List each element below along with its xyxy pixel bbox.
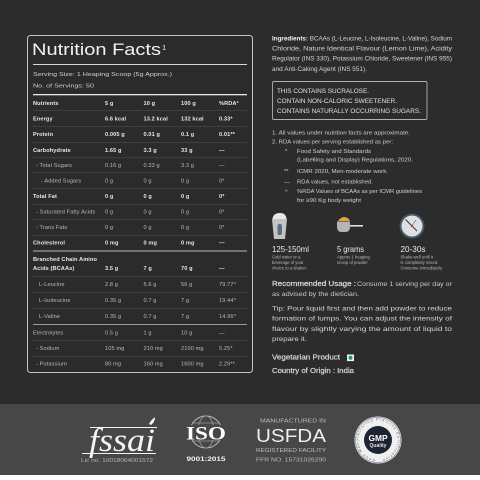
- nutrition table: - Total Sugars: [36, 163, 72, 169]
- nutrition table: 0 g: [105, 210, 113, 216]
- serving information: Serving Size: 1 Heaping Scoop (5g Approx.): [33, 72, 172, 78]
- nutrition table: 0.33*: [219, 116, 233, 122]
- nutrition table: Acids (BCAAs): [33, 266, 74, 272]
- nutrition table: %RDA²: [219, 100, 239, 107]
- footnotes: ICMR 2020, Men-moderate work.: [297, 169, 388, 175]
- panel: certifications band: [0, 404, 480, 475]
- nutrition table: 0 mg: [144, 240, 157, 246]
- nutrition table: 3.3 g: [144, 148, 157, 154]
- nutrition table: 0 g: [105, 178, 113, 184]
- footnotes: *: [285, 149, 288, 155]
- nutrition table: 0.01 g: [144, 132, 161, 138]
- nutrition table: 0.33 g: [144, 163, 160, 169]
- nutrition table: 0 g: [181, 194, 190, 200]
- logo: fssai: Lic no. 10018064001572: [81, 458, 153, 464]
- step: powder amount: Approx 1 heaping: [337, 254, 370, 260]
- nutrition table: 0 g: [105, 225, 113, 231]
- nutrition table: 0*: [219, 225, 225, 231]
- nutrition table: 14.96^: [219, 314, 237, 320]
- step: shake time: is completely mixed.: [400, 260, 438, 265]
- step: powder amount: [337, 245, 370, 265]
- step: water amount: choice to a shaker.: [272, 266, 307, 270]
- logo: USFDA registered: REGISTERED FACILITY: [256, 448, 326, 454]
- callout: sweetener warning: CONTAINS NATURALLY OCCURRING SUGARS.: [277, 108, 421, 115]
- recommended usage: as advised by the dietician.: [272, 291, 359, 298]
- nutrition table: 0.005 g: [105, 132, 125, 138]
- title: Nutrition Facts: [32, 40, 161, 59]
- serving information: No. of Servings: 50: [33, 84, 94, 90]
- nutrition table: 0.5 g: [105, 330, 118, 336]
- footnotes: %RDA Values of BCAAs as per ICMR guidelines: [297, 189, 422, 195]
- step: water amount: beverage of your: [272, 260, 304, 265]
- vegetarian product: Vegetarian Product: [272, 354, 340, 362]
- icon: scoop: [337, 217, 363, 232]
- ingredients text: Ingredients: BCAAs (L-Leucine, L-Isoleucine, L-Valine), Sodium: [272, 36, 452, 42]
- nutrition table: L-Valine: [39, 314, 60, 320]
- recommended usage: Recommended Usage :: [272, 281, 356, 288]
- nutrition table: Electrolytes: [33, 330, 63, 336]
- nutrition table: 0.16 g: [105, 163, 121, 169]
- icon: shaker: [272, 213, 287, 239]
- nutrition table: 2.29**: [219, 362, 236, 368]
- nutrition table: 7 g: [181, 298, 189, 304]
- footnotes: 2. RDA values per serving established as per:: [272, 139, 393, 145]
- nutrition table: 2100 mg: [181, 346, 204, 352]
- step: powder amount: scoop of powder: [337, 260, 368, 265]
- nutrition table: 0 g: [144, 210, 152, 216]
- footnotes: ^: [285, 190, 288, 196]
- logo: ISO 9001: [186, 416, 226, 463]
- tip: prepare it.: [272, 336, 307, 343]
- nutrition table: 210 mg: [144, 346, 163, 352]
- nutrition table: 19.44^: [219, 298, 237, 304]
- recommended usage: Consume 1 serving per day or: [357, 281, 452, 288]
- callout: sweetener warning: THIS CONTAINS SUCRALOSE.: [277, 88, 369, 95]
- nutrition table: 132 kcal: [181, 116, 204, 122]
- nutrition table: 0.1 g: [181, 132, 195, 138]
- nutrition table: 0.01**: [219, 132, 236, 138]
- nutrition table: - Saturated Fatty Acids: [36, 210, 95, 216]
- nutrition table: 0 g: [105, 194, 114, 200]
- nutrition table: 56 g: [181, 282, 192, 288]
- footnotes: **: [284, 169, 289, 175]
- step: shake time: 20-30s: [400, 245, 426, 254]
- nutrition table: 5.6 g: [144, 282, 157, 288]
- nutrition table: —: [219, 163, 225, 169]
- nutrition table: 3.5 g: [105, 266, 119, 272]
- nutrition table: 0 g: [181, 225, 189, 231]
- step: water amount: Cold water or a: [272, 254, 301, 260]
- footnotes: —: [284, 180, 290, 186]
- nutrition table: 1600 mg: [181, 362, 204, 368]
- nutrition table: Energy: [33, 116, 53, 122]
- nutrition table: 10 g: [181, 330, 192, 336]
- nutrition table: 7 g: [144, 266, 152, 272]
- nutrition table: - Sodium: [36, 346, 60, 352]
- ingredients text: Chloride, Nature Identical Flavour (Lemon Lime), Acidity: [272, 46, 453, 52]
- nutrition table: 2.8 g: [105, 282, 118, 288]
- serving information: [33, 72, 172, 90]
- nutrition table: 80 mg: [105, 362, 121, 368]
- nutrition table: 5.25*: [219, 346, 233, 352]
- nutrition table: 1 g: [144, 330, 152, 336]
- nutrition table: - Trans Fats: [36, 225, 67, 231]
- nutrition table: 0 g: [144, 178, 152, 184]
- step: powder amount: 5 grams: [337, 245, 364, 254]
- logo: fssai: [81, 417, 157, 464]
- footnotes: for ≥90 Kg body weight: [297, 198, 361, 204]
- nutrition table: 33 g: [181, 148, 193, 154]
- nutrition table: Carbohydrate: [33, 148, 71, 154]
- nutrition table: —: [219, 240, 225, 246]
- tip: formation of lumps. You can adjust the intensity of: [272, 316, 452, 322]
- nutrition table: 5 g: [105, 101, 114, 107]
- nutrition table: —: [219, 330, 225, 336]
- logo: USFDA registered: FFR NO. 15731026290: [256, 458, 326, 464]
- nutrition table: 0*: [219, 194, 225, 200]
- tip: Tip: Pour liquid first and then add powder to reduce: [272, 306, 453, 312]
- logo: ISO 9001: 9001:2015: [186, 456, 226, 463]
- nutrition table: 0 mg: [105, 240, 119, 246]
- step: water amount: 125-150ml: [272, 245, 309, 254]
- nutrition table: 0 g: [181, 210, 189, 216]
- nutrition table: 160 mg: [144, 362, 163, 368]
- nutrition table: 0 g: [181, 178, 189, 184]
- logo: GMP quality: GMP: [368, 433, 388, 443]
- nutrition table: —: [219, 266, 225, 272]
- nutrition table: 0.7 g: [144, 298, 157, 304]
- logo: GMP quality: Quality: [370, 443, 387, 449]
- callout: sweetener warning: CONTAIN NON-CALORIC SWEETENER.: [277, 98, 397, 105]
- nutrition table: 7 g: [181, 314, 189, 320]
- step: shake time: Consume immediately.: [400, 266, 443, 270]
- nutrition table: 0 mg: [181, 240, 195, 246]
- nutrition table: 0.35 g: [105, 298, 121, 304]
- nutrition table: 1.65 g: [105, 148, 122, 154]
- nutrition table: 70 g: [181, 266, 193, 272]
- ingredients text: and Anti-Caking Agent (INS 551).: [272, 66, 367, 73]
- logo: ISO 9001: ISO: [186, 424, 226, 444]
- country of origin: Country of Origin : India: [272, 368, 354, 375]
- tip: flavour by slightly varying the amount of liquid to: [272, 326, 453, 333]
- nutrition table: 0.35 g: [105, 314, 121, 320]
- nutrition table: - Added Sugars: [41, 178, 81, 184]
- footnotes: 1. All values under nutrition facts are approximate.: [272, 131, 410, 137]
- nutrition table: 0 g: [144, 225, 152, 231]
- tip: [272, 306, 453, 343]
- nutrition table: 105 mg: [105, 346, 124, 352]
- nutrition table: Branched Chain Amino: [33, 257, 98, 263]
- nutrition table: 79.77^: [219, 282, 237, 288]
- footnotes: (Labelling and Display) Regulations, 2020.: [297, 158, 413, 164]
- panel: nutrition facts: [28, 36, 252, 372]
- step: shake time: Shake well until it: [400, 254, 434, 260]
- ingredients text: Regulator (INS 330), Potassium Chloride, Sweetener (INS 955): [272, 56, 452, 62]
- ingredients text: [272, 36, 453, 73]
- logo: USFDA registered: [256, 418, 327, 464]
- nutrition table: Protein: [33, 132, 54, 138]
- nutrition table: [33, 100, 239, 368]
- nutrition table: 3.3 g: [181, 163, 194, 169]
- nutrition table: Cholesterol: [33, 240, 65, 246]
- logo: fssai: fssai: [89, 423, 155, 459]
- nutrition table: L-Isoleucine: [39, 298, 71, 304]
- logo: USFDA registered: MANUFACTURED IN: [260, 418, 326, 424]
- nutrition table: 0 g: [144, 194, 152, 200]
- nutrition table: Nutrients: [33, 101, 59, 107]
- nutrition table: 0*: [219, 178, 225, 184]
- nutrition table: L-Leucine: [39, 282, 65, 288]
- nutrition table: 100 g: [181, 101, 196, 107]
- nutrition table: 0*: [219, 210, 225, 216]
- footnotes: Food Safety and Standards: [297, 149, 371, 155]
- nutrition table: - Potassium: [36, 362, 67, 368]
- nutrition table: 6.6 kcal: [105, 116, 127, 122]
- logo: USFDA registered: USFDA: [256, 425, 327, 446]
- nutrition table: Total Fat: [33, 194, 57, 200]
- title: 1: [162, 43, 166, 52]
- footnotes: [272, 131, 422, 204]
- step: shake time: [400, 245, 443, 270]
- recommended usage: [272, 281, 452, 298]
- footnotes: RDA values, not established.: [297, 180, 373, 186]
- nutrition table: 0.7 g: [144, 314, 157, 320]
- nutrition table: 10 g: [144, 101, 156, 107]
- icon: clock: [400, 214, 424, 238]
- logo: GMP quality: Good Manufacturing Practice Certification: [356, 418, 400, 462]
- callout: sweetener warning: [272, 82, 427, 120]
- nutrition table: 13.2 kcal: [144, 116, 168, 122]
- step: water amount: [272, 245, 309, 270]
- nutrition table: —: [219, 148, 225, 154]
